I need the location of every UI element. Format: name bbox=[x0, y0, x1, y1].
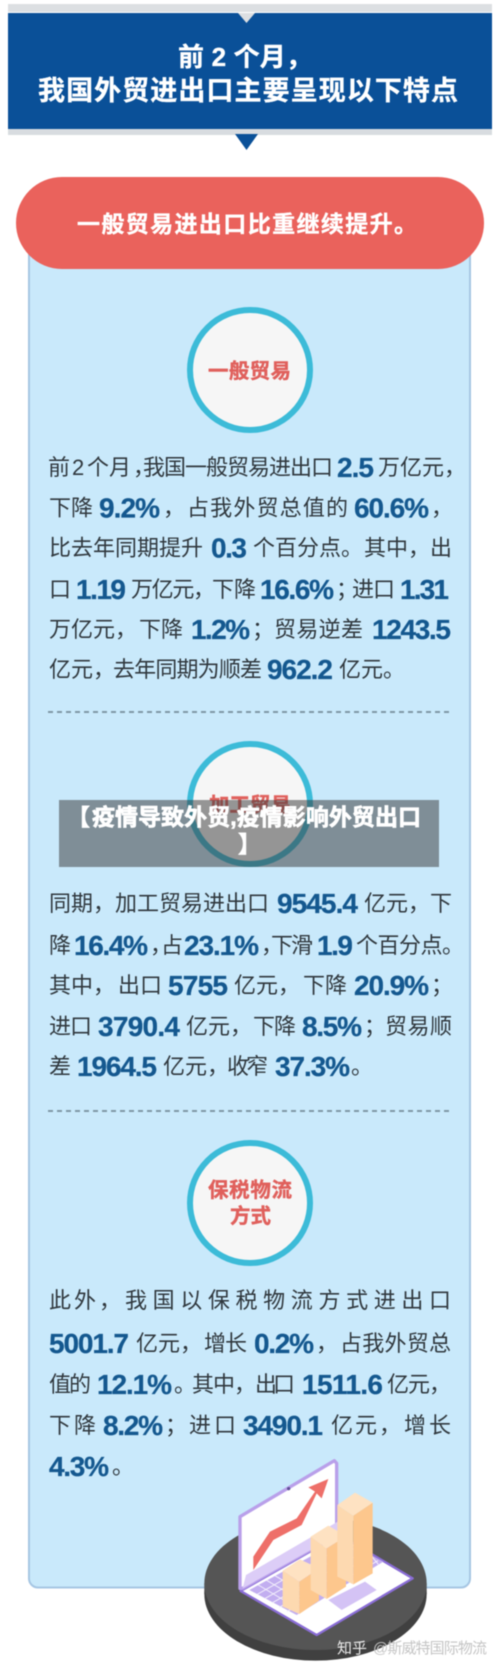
text block: bonded logistics: 其中， bbox=[192, 1372, 256, 1397]
text block: bonded logistics: 增长 bbox=[204, 1331, 247, 1356]
text block: general trade: ， bbox=[163, 496, 185, 520]
text block: processing trade: 下降 bbox=[253, 1014, 296, 1039]
text block: bonded logistics: 出口 bbox=[255, 1372, 295, 1397]
text block: general trade: 2.5 bbox=[337, 452, 374, 483]
badge: processing trade bbox=[190, 744, 310, 864]
text block: processing trade: 亿元， bbox=[186, 1014, 252, 1039]
illustration: laptop with bar chart on dark disk bbox=[204, 1461, 427, 1661]
text block: processing trade: ， bbox=[261, 933, 283, 958]
text block: general trade: 万亿元， bbox=[131, 577, 215, 602]
text block: processing trade: 个百分点。 bbox=[356, 933, 464, 958]
badge: processing trade: 加工贸易 bbox=[209, 794, 291, 817]
text block: bonded logistics: 5001.7 bbox=[49, 1328, 129, 1359]
text block: general trade: ； bbox=[252, 617, 274, 642]
text block: bonded logistics: 4.3% bbox=[49, 1451, 109, 1482]
text block: general trade: 962.2 bbox=[267, 654, 333, 685]
text block: bonded logistics: 亿元， bbox=[136, 1331, 202, 1356]
text block: general trade: 前 bbox=[48, 455, 70, 480]
text block: processing trade: 8.5% bbox=[302, 1011, 362, 1042]
text block: general trade: 口 bbox=[49, 577, 71, 602]
text block: bonded logistics: 1511.6 bbox=[302, 1369, 383, 1400]
text block: processing trade: 亿元， bbox=[364, 891, 430, 916]
text block: general trade: 去年同期为顺差 bbox=[113, 657, 262, 682]
text block: general trade: 1.2% bbox=[191, 614, 250, 645]
badge: bonded logistics: 方式 bbox=[230, 1204, 272, 1228]
text block: general trade: 我国一般贸易进出口 bbox=[143, 455, 333, 480]
text block: general trade: 下降 bbox=[212, 577, 256, 602]
text block: processing trade: 1.9 bbox=[317, 930, 353, 961]
text block: general trade: 60.6% bbox=[354, 492, 429, 524]
text block: processing trade: ， bbox=[150, 933, 172, 958]
header banner bbox=[8, 4, 492, 150]
text block: processing trade: 下 bbox=[430, 891, 452, 916]
text block: general trade: ； bbox=[336, 577, 358, 602]
text block: general trade: 2 bbox=[72, 455, 84, 480]
text block: general trade: 1.19 bbox=[76, 574, 126, 605]
caption overlay: 【 bbox=[67, 804, 90, 830]
text block: processing trade: 同期， bbox=[49, 891, 115, 916]
text block: processing trade: 。 bbox=[351, 1054, 373, 1079]
text block: bonded logistics: 增长 bbox=[404, 1413, 451, 1438]
text block: general trade: 比去年同期提升 bbox=[49, 536, 203, 560]
text block: processing trade: 亿元， bbox=[234, 973, 300, 998]
bar 2 bbox=[311, 1526, 346, 1599]
text block: processing trade: 差 bbox=[49, 1054, 71, 1079]
text block: processing trade: 加工贸易进出口 bbox=[115, 891, 269, 916]
text block: processing trade: 亿元， bbox=[163, 1054, 229, 1079]
text block: processing trade: 16.4% bbox=[74, 930, 148, 961]
text block: processing trade: 出口 bbox=[118, 973, 162, 998]
text block: bonded logistics: 。 bbox=[174, 1372, 196, 1397]
watermark: @斯威特国际物流 bbox=[373, 1640, 487, 1657]
text block: processing trade: 占 bbox=[161, 933, 183, 958]
text block: processing trade: 收窄 bbox=[227, 1054, 268, 1079]
text block: processing trade: 23.1% bbox=[184, 930, 259, 961]
touchpad bbox=[328, 1582, 377, 1610]
text block: general trade bbox=[48, 452, 466, 685]
text block: general trade: 下降 bbox=[139, 617, 183, 642]
text block: processing trade: 贸易顺 bbox=[385, 1014, 452, 1039]
caption overlay: 】 bbox=[238, 831, 261, 857]
text block: processing trade: ； bbox=[364, 1014, 386, 1039]
text block: general trade: 进口 bbox=[352, 577, 395, 602]
text block: bonded logistics: 12.1% bbox=[97, 1369, 172, 1400]
caption overlay bbox=[59, 800, 439, 867]
text block: bonded logistics bbox=[49, 1288, 451, 1482]
text block: bonded logistics: 3490.1 bbox=[243, 1410, 323, 1441]
text block: processing trade: 进口 bbox=[49, 1014, 92, 1039]
text block: general trade: 0.3 bbox=[211, 532, 247, 564]
badge: bonded logistics: 保税物流 bbox=[208, 1179, 292, 1202]
badge: general trade: 一般贸易 bbox=[208, 360, 291, 383]
text block: general trade: ， bbox=[431, 496, 453, 520]
text block: general trade: 9.2% bbox=[99, 492, 160, 524]
text block: general trade: 万亿元， bbox=[49, 617, 137, 642]
text block: general trade: 贸易逆差 bbox=[274, 617, 363, 642]
text block: bonded logistics: 8.2% bbox=[103, 1410, 163, 1441]
text block: bonded logistics: 此外， bbox=[49, 1288, 121, 1313]
header banner: 我国外贸进出口主要呈现以下特点 bbox=[38, 76, 458, 106]
caption overlay: 疫情导致外贸,疫情影响外贸出口 bbox=[92, 804, 421, 830]
badge: general trade bbox=[190, 310, 310, 430]
keyboard bbox=[249, 1539, 383, 1615]
laptop base bbox=[241, 1535, 413, 1635]
badge: bonded logistics bbox=[190, 1143, 310, 1263]
text block: bonded logistics: 值的 bbox=[49, 1372, 91, 1397]
text block: general trade: 个月 bbox=[87, 455, 131, 480]
bar 3 bbox=[337, 1493, 373, 1584]
text block: general trade: 占我外贸总值的 bbox=[187, 496, 348, 520]
text block: bonded logistics: 0.2% bbox=[254, 1328, 314, 1359]
text block: processing trade: 3790.4 bbox=[98, 1011, 180, 1042]
text block: general trade: 下降 bbox=[49, 496, 93, 520]
text block: processing trade: 20.9% bbox=[354, 970, 429, 1001]
text block: general trade: 亿元。 bbox=[339, 657, 405, 682]
watermark: 知乎 bbox=[337, 1640, 367, 1657]
text block: processing trade: ； bbox=[431, 973, 453, 998]
text block: general trade: ， bbox=[133, 455, 155, 480]
text block: bonded logistics: 进口 bbox=[189, 1413, 236, 1438]
text block: bonded logistics: 亿元， bbox=[331, 1413, 401, 1438]
text block: general trade: 16.6% bbox=[260, 574, 334, 605]
text block: general trade: 出 bbox=[430, 536, 452, 560]
text block: bonded logistics: 下降 bbox=[49, 1413, 96, 1438]
text block: bonded logistics: 我国以保税物流方式进出口 bbox=[125, 1288, 451, 1313]
text block: general trade: 1243.5 bbox=[372, 614, 451, 645]
text block: processing trade: 1964.5 bbox=[77, 1051, 157, 1082]
laptop screen bbox=[240, 1461, 337, 1588]
text block: bonded logistics: 亿元， bbox=[387, 1372, 451, 1397]
text block: general trade: 万亿元， bbox=[378, 455, 466, 480]
text block: general trade: 1.31 bbox=[400, 574, 449, 605]
text block: general trade: 个百分点。 bbox=[253, 536, 363, 560]
text block: processing trade: 降 bbox=[49, 933, 71, 958]
panel: content card bbox=[29, 230, 470, 1588]
red heading pill: 一般贸易进出口比重继续提升。 bbox=[77, 211, 417, 237]
red heading pill bbox=[16, 177, 484, 269]
text block: processing trade: 下降 bbox=[303, 973, 347, 998]
text block: processing trade: 其中， bbox=[49, 973, 115, 998]
bar 1 bbox=[283, 1559, 319, 1614]
text block: processing trade: 5755 bbox=[168, 970, 228, 1001]
text block: processing trade: 下滑 bbox=[271, 933, 313, 958]
text block: general trade: 其中， bbox=[364, 536, 430, 560]
text block: bonded logistics: ， bbox=[316, 1331, 338, 1356]
header banner: 前 2 个月， bbox=[178, 42, 312, 72]
trend arrow bbox=[253, 1479, 328, 1570]
text block: bonded logistics: ； bbox=[165, 1413, 187, 1438]
text block: general trade: 亿元， bbox=[49, 657, 115, 682]
text block: bonded logistics: 。 bbox=[112, 1454, 134, 1479]
text block: processing trade: 9545.4 bbox=[277, 888, 358, 919]
text block: processing trade: 37.3% bbox=[275, 1051, 350, 1082]
text block: bonded logistics: 占我外贸总 bbox=[340, 1331, 451, 1356]
text block: processing trade bbox=[49, 888, 464, 1082]
